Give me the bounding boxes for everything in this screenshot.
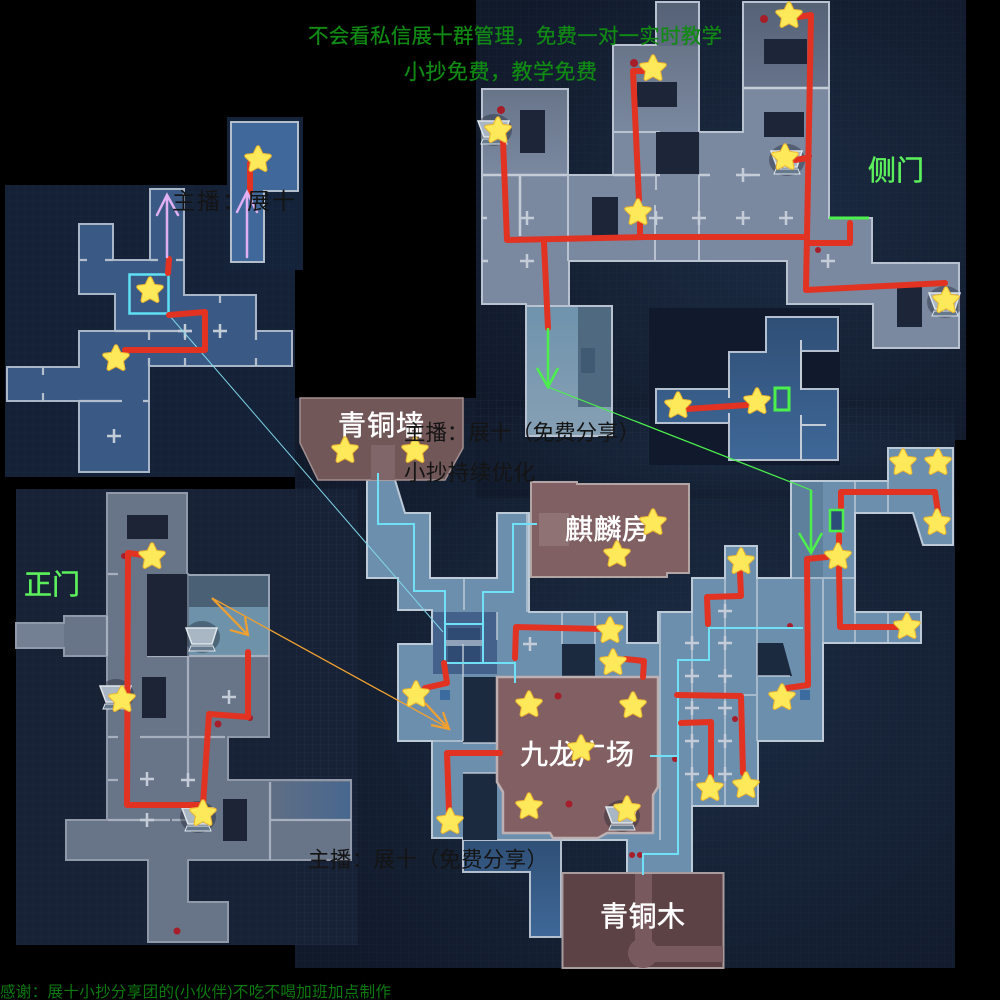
- top notice line 2: 小抄免费，教学免费: [404, 61, 597, 84]
- room labels: 青铜墙: [338, 410, 424, 441]
- room labels: 九龙广场: [520, 739, 634, 770]
- room: right wing upper darker part: [792, 482, 823, 577]
- streamer credit top-left: 主播：展十: [172, 188, 295, 214]
- room labels: 麒麟房: [565, 514, 650, 545]
- room: upper darker rooms: [481, 3, 829, 261]
- room labels: [338, 410, 685, 932]
- panel: small blue upper room: [231, 122, 298, 262]
- note: keep optimizing: 小抄持续优化: [404, 461, 535, 485]
- room: nine dragon plaza: [497, 677, 658, 838]
- panel: main gate floor plan: [16, 493, 351, 942]
- room: dark stair hall: [433, 612, 497, 674]
- room labels: 青铜木: [600, 901, 685, 932]
- holes in floor: [127, 515, 247, 841]
- orange arrows: [212, 598, 450, 729]
- streamer credit center: 主播：展十（免费分享）: [404, 421, 640, 445]
- red route lines: [125, 15, 945, 812]
- marker: green box right: [830, 510, 843, 531]
- holes in floor: [463, 643, 792, 840]
- room: bronze wall: [300, 398, 463, 480]
- gate label: side door: 侧门: [868, 155, 924, 186]
- marker: blue square right: [800, 690, 810, 700]
- room: blue gradient room: [272, 782, 350, 819]
- room: bronze wood: [562, 873, 724, 968]
- panel: central light-blue wings: [367, 448, 953, 937]
- room: flooded room: [189, 575, 269, 656]
- thin cyan guide lines: [169, 315, 803, 875]
- top notice line 1: 不会看私信展十群管理，免费一对一实时教学: [308, 25, 722, 48]
- stars: [104, 4, 958, 832]
- green arrows: [537, 218, 869, 553]
- room: qilin room: [531, 482, 689, 577]
- marker: green box: [775, 388, 789, 410]
- gate label: main gate: 正门: [24, 569, 80, 600]
- purple arrows: [157, 192, 257, 257]
- treasure chests: [98, 114, 963, 833]
- red enemy markers: [121, 15, 821, 934]
- holes in floor: [520, 39, 922, 327]
- marker: cyan box: [130, 274, 168, 314]
- streamer credit bottom: 主播：展十（免费分享）: [308, 848, 548, 872]
- marker: blue square: [440, 690, 450, 700]
- room: flooded stair room: [526, 306, 612, 436]
- panel: top-left blue floor plan: [7, 189, 292, 472]
- panel: side door sub map: [656, 317, 838, 460]
- panel: side door floor plan: [481, 2, 959, 436]
